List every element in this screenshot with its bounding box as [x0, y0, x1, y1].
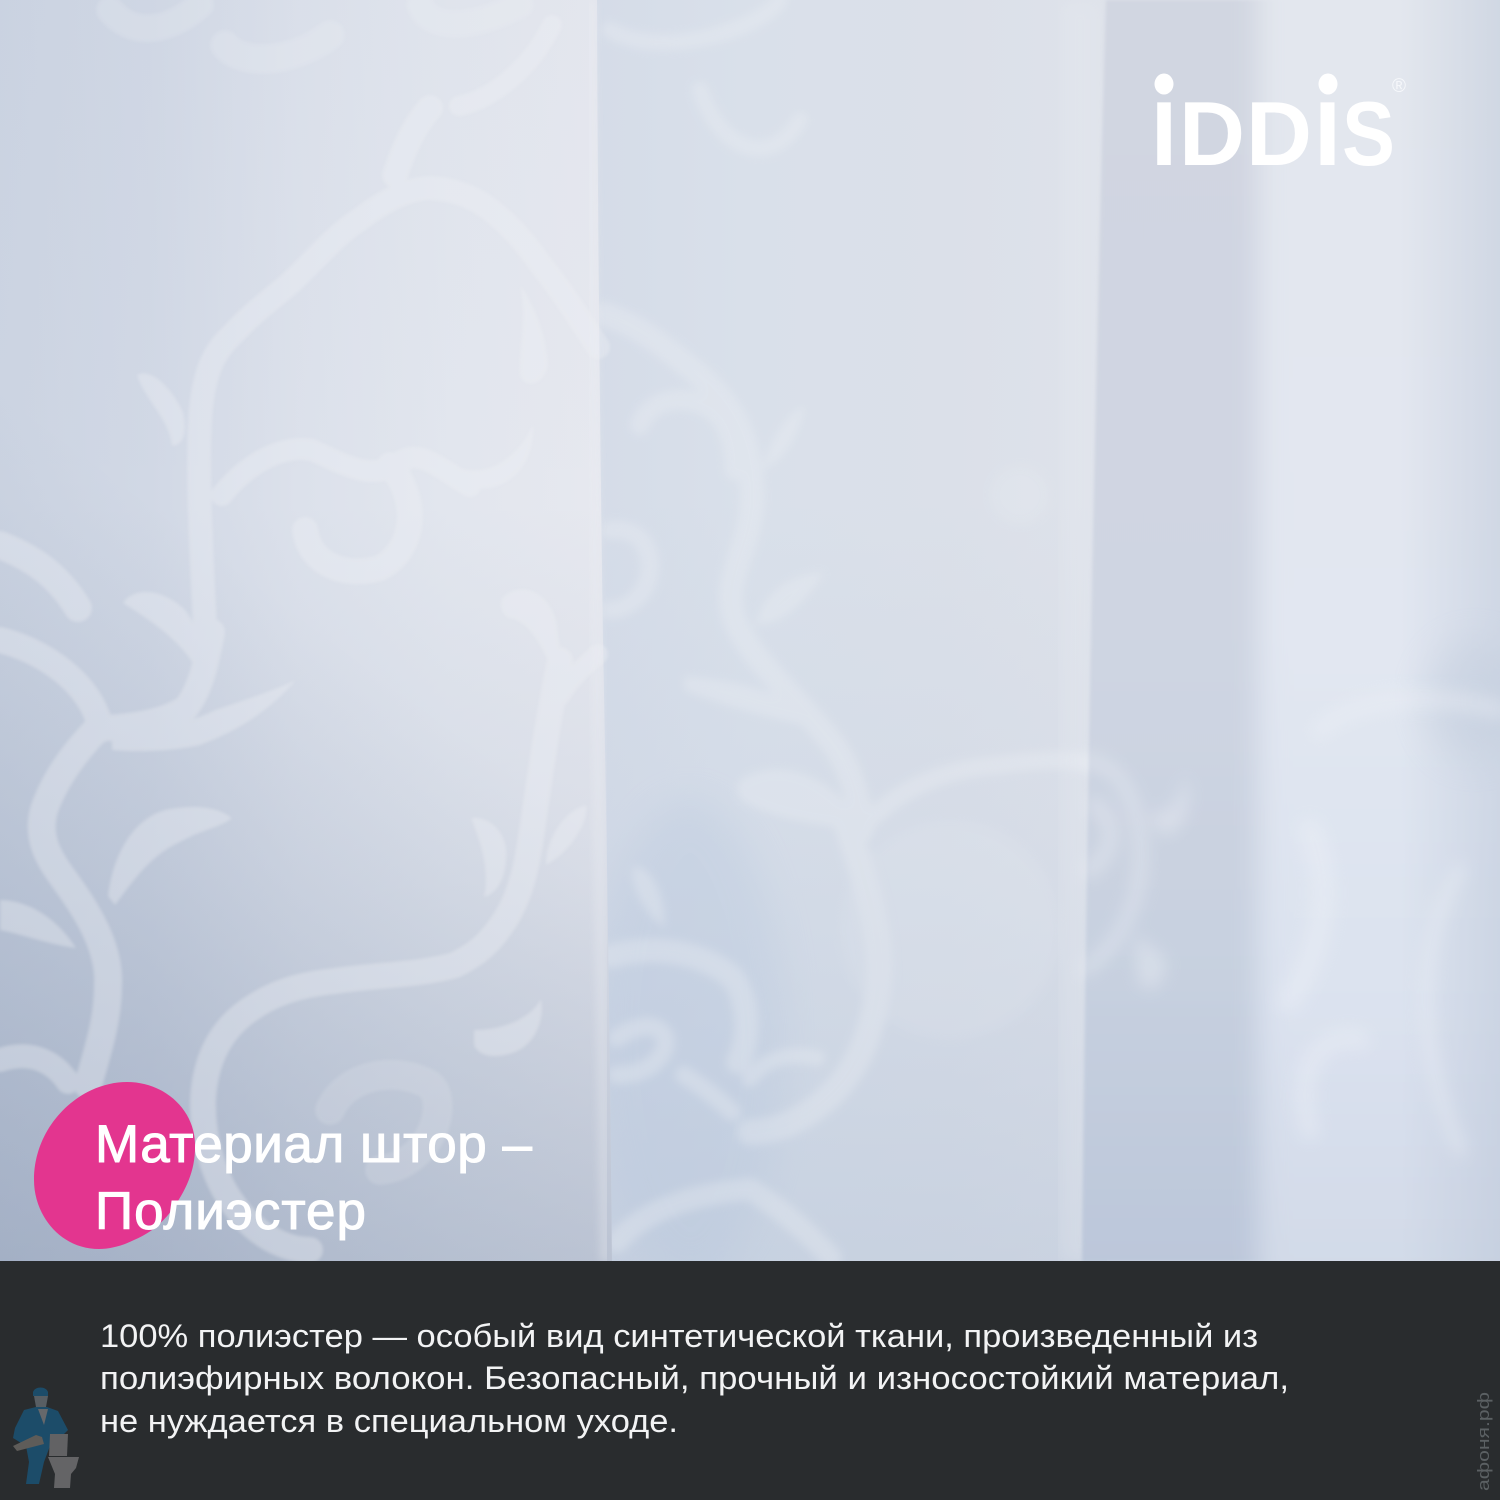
title	[95, 1115, 533, 1241]
centre fold light edge	[1060, 0, 1100, 1262]
brand logo: IDDIS: S	[1342, 84, 1395, 185]
brand logo: IDDIS: ®	[1392, 76, 1406, 97]
fold edge highlight	[599, 968, 607, 1261]
fabric vine pattern right panels	[1088, 696, 1500, 984]
brand logo: IDDIS: I	[1314, 84, 1341, 185]
fabric vine pattern centre panel	[608, 600, 889, 1261]
title: Полиэстер	[95, 1182, 366, 1241]
watermark: site name: афоня.рф	[1474, 1392, 1493, 1491]
brand logo: IDDIS: D	[1179, 84, 1245, 185]
description text: полиэфирных волокон. Безопасный, прочный и износостойкий материал,	[100, 1360, 1289, 1396]
brand logo: IDDIS	[1151, 74, 1406, 185]
pink blob accent	[34, 1082, 195, 1249]
left curtain fold	[0, 0, 612, 1262]
title: Материал штор –	[95, 1115, 533, 1174]
brand logo: IDDIS: I	[1151, 84, 1177, 185]
brand logo: IDDIS: D	[1246, 84, 1312, 185]
right light fold	[1254, 0, 1474, 1261]
description text: 100% полиэстер — особый вид синтетической ткани, произведенный из	[100, 1318, 1258, 1354]
description text	[100, 1318, 1289, 1439]
icon: plumber with toilet watermark	[13, 1388, 79, 1488]
description text: не нуждается в специальном уходе.	[100, 1403, 678, 1439]
shaded fold band	[1082, 0, 1266, 1261]
fabric vine pattern left panel	[0, 291, 608, 1261]
dark footer band	[0, 1261, 1500, 1500]
